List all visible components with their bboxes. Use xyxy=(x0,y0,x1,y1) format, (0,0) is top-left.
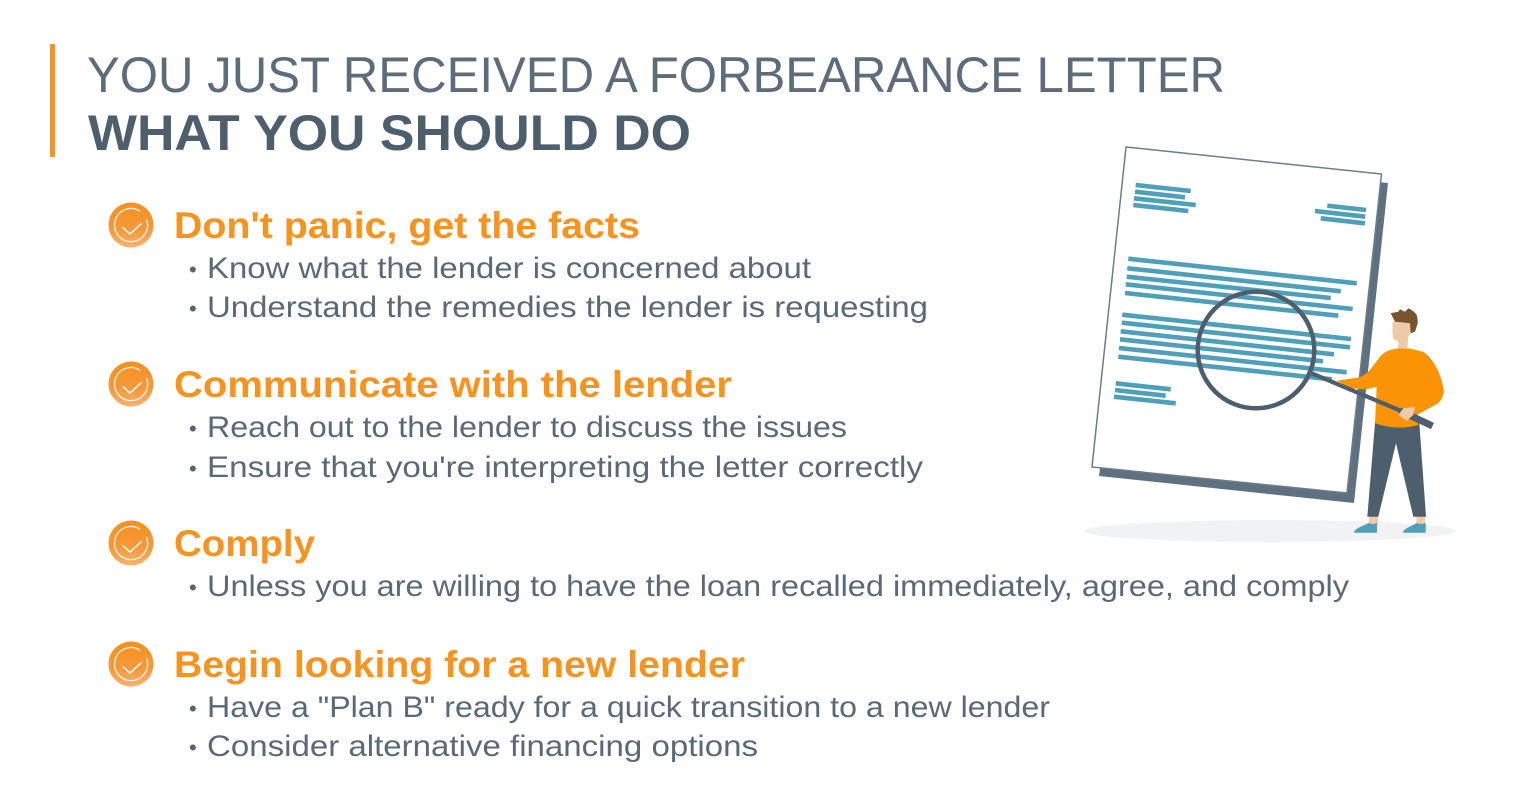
bullet 2: Understand the remedies the lender is requesting xyxy=(207,291,928,324)
heading: Begin looking for a new lender xyxy=(174,644,745,685)
heading: Don't panic, get the facts xyxy=(174,205,640,246)
bullet 1: Reach out to the lender to discuss the issues xyxy=(207,411,847,444)
title block xyxy=(50,44,1225,161)
magnifying glass xyxy=(1198,292,1432,426)
icon: check circle xyxy=(108,362,154,406)
title line 2: WHAT YOU SHOULD DO xyxy=(88,105,691,161)
icon: check circle xyxy=(108,520,154,566)
person body xyxy=(1337,308,1444,533)
bullet 2: • xyxy=(189,735,197,760)
bullet 1: Unless you are willing to have the loan recalled immediately, agree, and comply xyxy=(207,570,1349,603)
bullet 1: Know what the lender is concerned about xyxy=(207,252,812,285)
neck and face xyxy=(1392,322,1411,348)
bullet 1: • xyxy=(189,416,197,441)
bullet 1: • xyxy=(189,575,197,600)
bullet 2: Ensure that you're interpreting the letter correctly xyxy=(207,451,923,484)
bullet 1: Have a "Plan B" ready for a quick transition to a new lender xyxy=(207,691,1050,724)
trousers xyxy=(1367,423,1426,517)
document text lines xyxy=(1114,185,1366,403)
section: communicate xyxy=(108,362,923,484)
bullet 1: • xyxy=(189,696,197,721)
document shadow xyxy=(1099,160,1388,503)
hair xyxy=(1391,308,1418,333)
thin shaft xyxy=(1312,373,1403,412)
heading: Communicate with the lender xyxy=(174,364,732,405)
heading: Comply xyxy=(174,523,315,564)
lens ring xyxy=(1198,292,1314,408)
handle grip xyxy=(1400,411,1432,426)
shoes xyxy=(1354,523,1426,533)
bullet 2: • xyxy=(189,456,197,481)
document page xyxy=(1092,147,1382,493)
accent bar xyxy=(50,44,55,157)
title line 1: YOU JUST RECEIVED A FORBEARANCE LETTER xyxy=(87,47,1225,103)
ankles xyxy=(1369,516,1425,524)
bullet 1: • xyxy=(189,257,197,282)
icon: check circle xyxy=(108,642,154,686)
sweater xyxy=(1337,348,1444,428)
icon: check circle xyxy=(108,202,154,248)
bullet 2: Consider alternative financing options xyxy=(207,730,758,763)
section: new lender xyxy=(108,642,1050,763)
illustration: person inspecting document xyxy=(1084,147,1456,542)
hand on handle xyxy=(1398,407,1415,421)
ground shadow xyxy=(1084,520,1456,542)
section: comply xyxy=(108,520,1349,603)
bullet 2: • xyxy=(189,296,197,321)
section: don't panic xyxy=(108,202,928,324)
